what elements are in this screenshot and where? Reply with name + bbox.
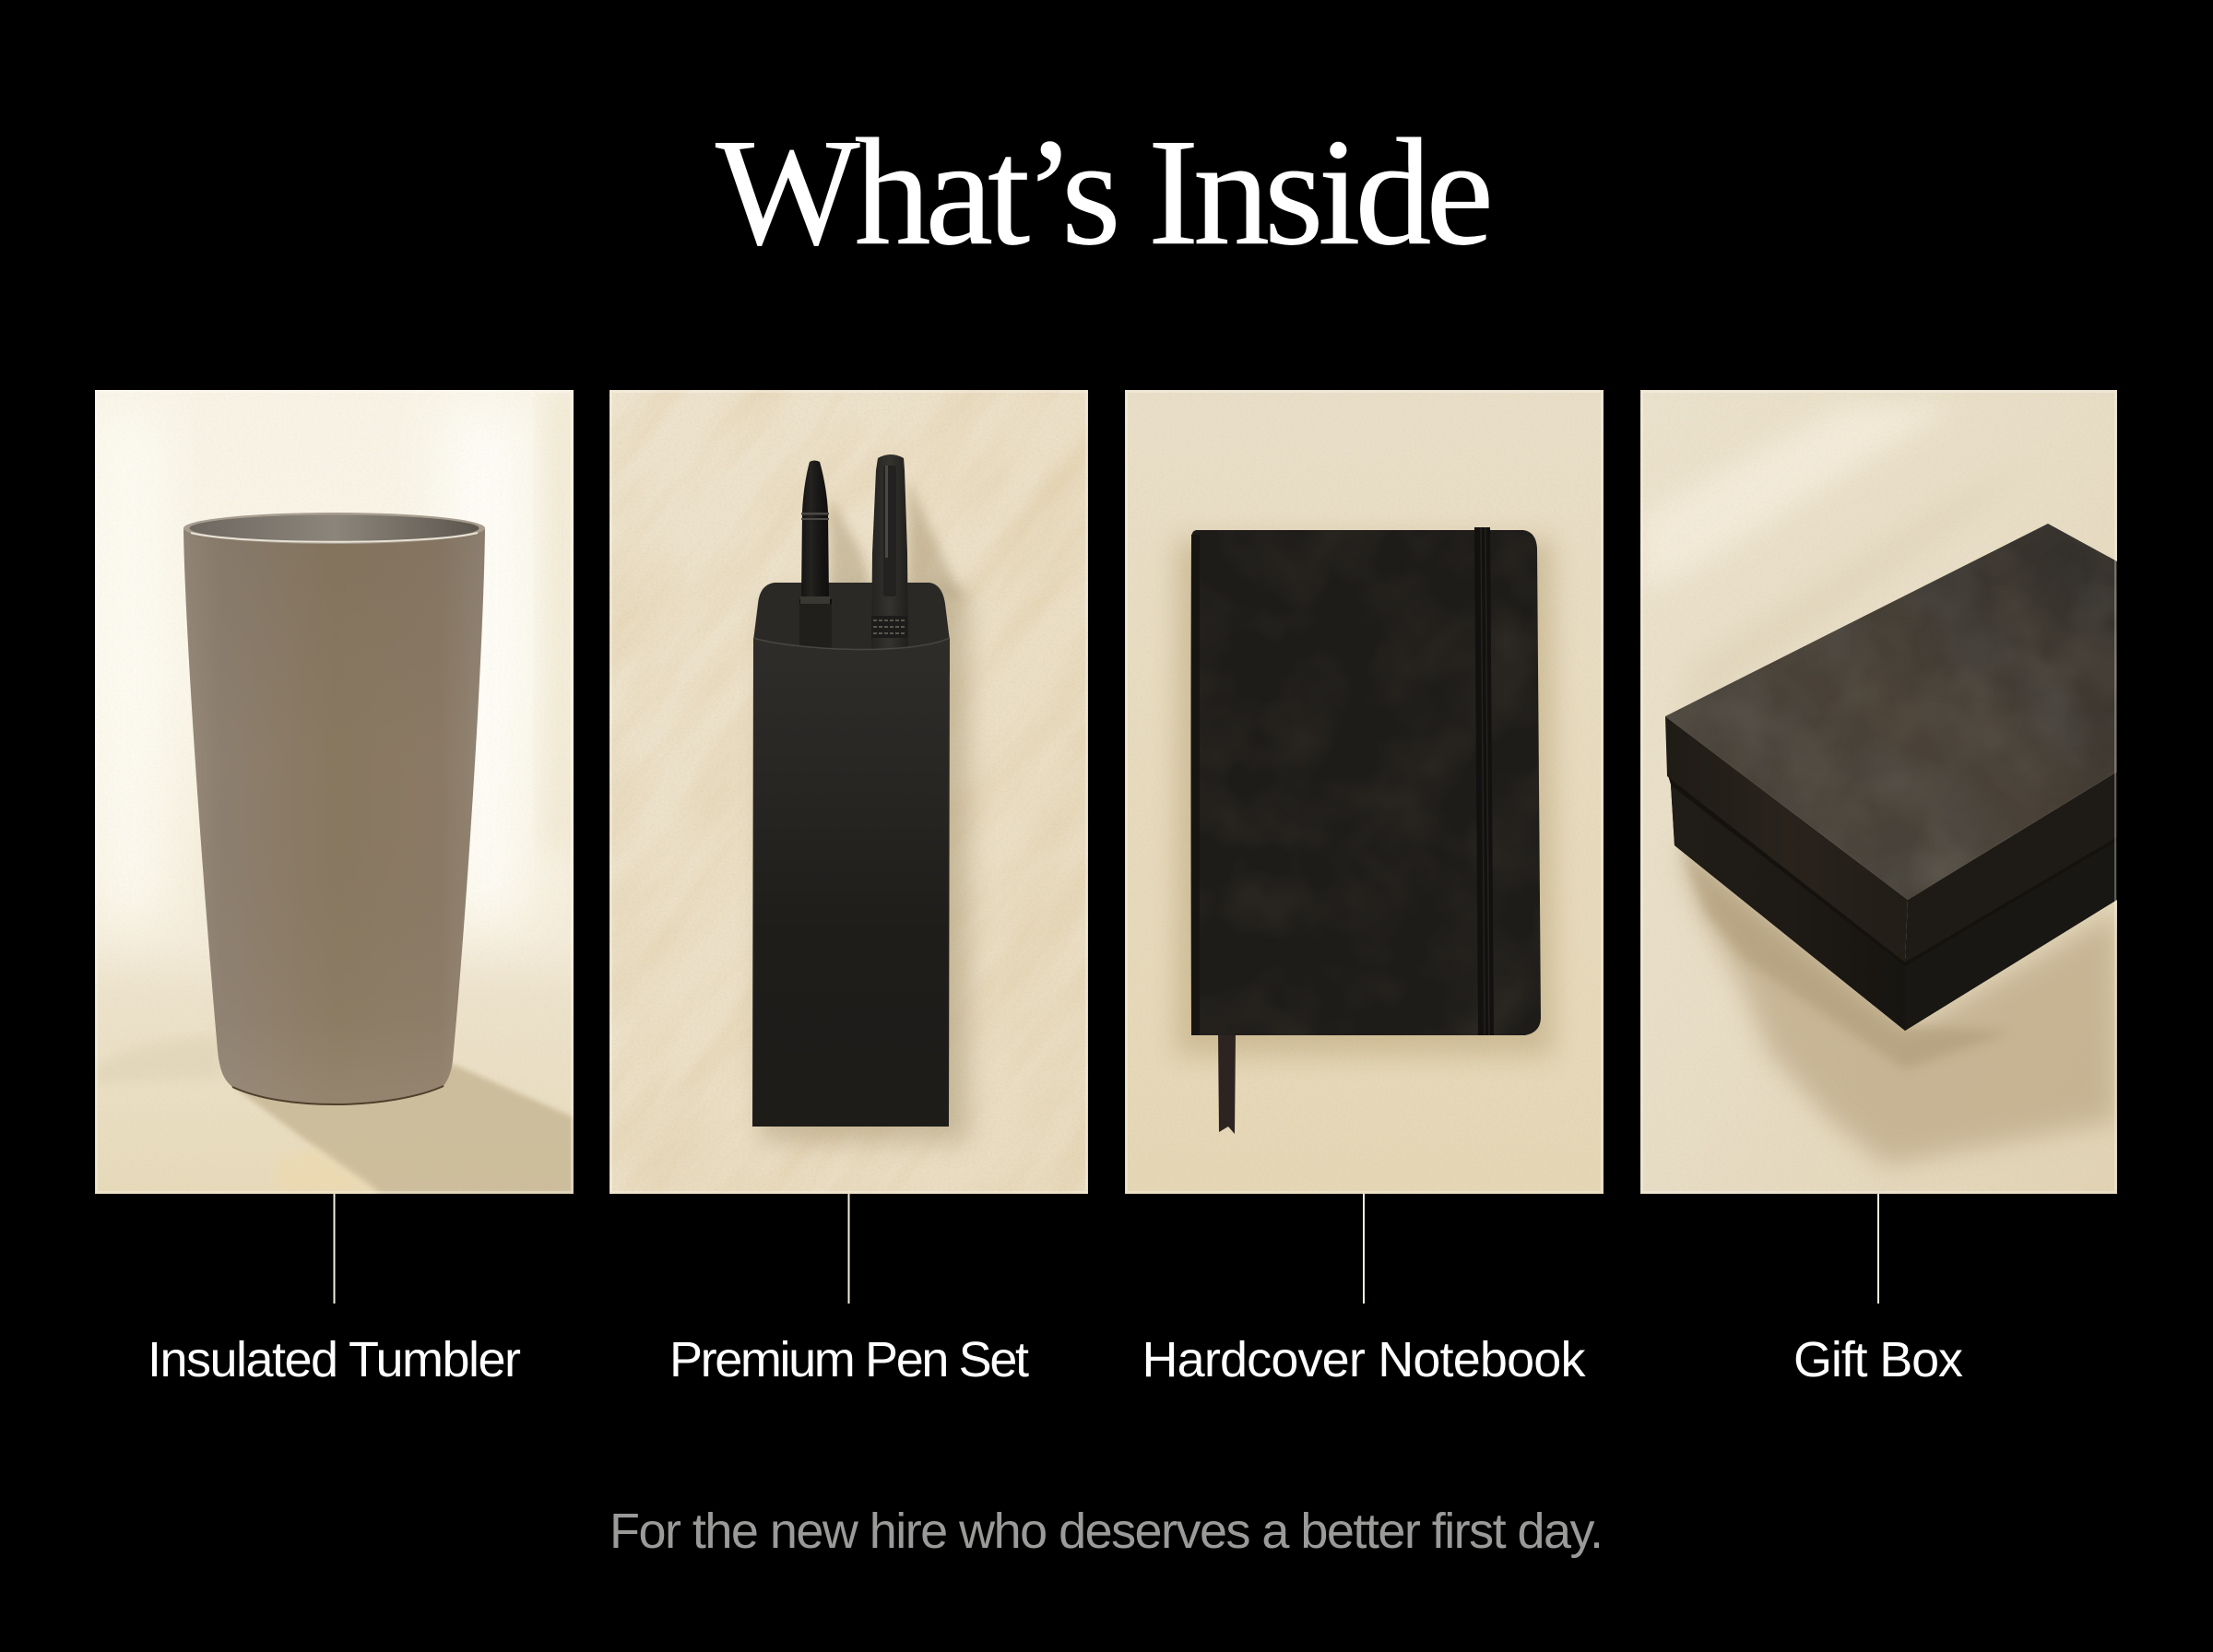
connector line <box>848 1194 850 1304</box>
shadow of sleeve <box>762 590 968 1141</box>
icon: ballpoint pen <box>799 461 832 659</box>
photo: notebook on linen <box>1125 390 1604 1194</box>
label: Premium Pen Set <box>669 1332 1029 1387</box>
label: Hardcover Notebook <box>1142 1332 1586 1387</box>
shadow of box <box>1677 848 2117 1165</box>
shadow of tumbler <box>235 1065 574 1194</box>
panel: hardcover notebook <box>1125 390 1604 1387</box>
connector line <box>334 1194 336 1304</box>
photo: gift box on linen <box>1640 390 2121 1194</box>
icon: notebook <box>1191 527 1542 1036</box>
icon: fountain pen <box>871 454 908 659</box>
panel: premium pen set <box>609 390 1088 1377</box>
shadow of notebook <box>1176 539 1554 1056</box>
icon: tumbler <box>183 513 485 1104</box>
icon: sleeve back flap <box>753 583 950 673</box>
photo: pens in sleeve <box>609 390 1088 1194</box>
icon: bookmark ribbon <box>1218 1032 1236 1134</box>
icon: sleeve front <box>752 638 950 1127</box>
icon: box base <box>1667 773 2117 1031</box>
elastic band <box>1474 527 1494 1035</box>
pen shadows <box>830 479 964 599</box>
icon: box lid <box>1660 516 2121 962</box>
connector line <box>1363 1194 1365 1304</box>
label: Gift Box <box>1793 1332 1963 1387</box>
connector line <box>1877 1194 1879 1304</box>
title: What’s Inside <box>716 107 1494 277</box>
tagline: For the new hire who deserves a better first day. <box>609 1504 1604 1559</box>
label: Insulated Tumbler <box>148 1332 521 1387</box>
panel: gift box <box>1640 390 2121 1387</box>
photo: tumbler on linen <box>95 390 581 1194</box>
panel: insulated tumbler <box>95 390 581 1387</box>
